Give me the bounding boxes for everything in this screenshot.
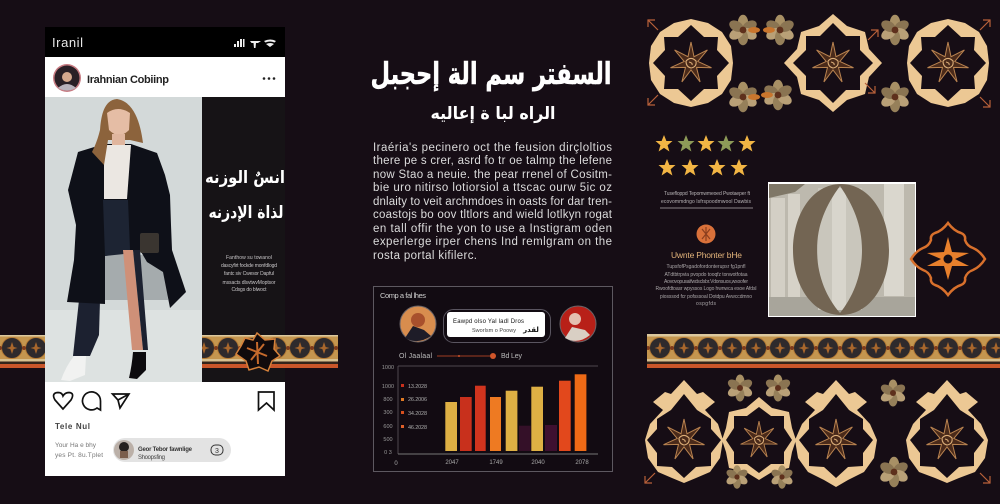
rating caption (660, 191, 753, 208)
comment pill: 3 (215, 448, 219, 455)
conversation: لقدر (522, 326, 539, 334)
medallion left (649, 19, 733, 107)
panel small text: Cdsgs do blwoct (232, 287, 267, 293)
orange star ornament (911, 223, 985, 295)
left ornamental band (0, 335, 338, 368)
slider legend: Ol Jaalaal (399, 353, 432, 360)
black boot (129, 352, 146, 379)
conversation: Sworlsm o Poowy (472, 328, 516, 334)
panel small text: dascyfirt fockde monfdlogd (221, 263, 277, 269)
x axis labels: 1749 (489, 460, 503, 466)
feature description: ospgfds (696, 301, 716, 307)
x axis labels: 2078 (575, 460, 589, 466)
shirt (104, 145, 131, 199)
fashion photo (45, 97, 202, 382)
architectural photo (768, 182, 916, 317)
profile header (45, 57, 285, 97)
comment pill (113, 438, 231, 462)
icon: send (112, 394, 129, 408)
icon: orange seal (696, 224, 716, 244)
ornate medallion (236, 333, 280, 371)
status bar: Iranil (52, 35, 83, 50)
hair (92, 99, 143, 165)
chart legend: 26.2006 (408, 397, 427, 403)
icon: bookmark (258, 392, 274, 410)
bar chart (382, 365, 598, 467)
arrows (645, 473, 990, 483)
comment pill: Geor Tebor fawnlige (138, 447, 193, 453)
body paragraph (373, 142, 613, 262)
panel small text: mssacts dlsvtwvMoptsor (222, 280, 276, 286)
panel small text: Fanthow su towanol (226, 255, 272, 261)
medallion right (907, 19, 989, 107)
feature description: Rwoofdtoasr wpyssos Logo hwnwca esoe Afdsl (656, 286, 756, 292)
y axis labels: 1000 (382, 365, 394, 371)
slider legend: Bd Ley (501, 353, 522, 360)
top medallions (648, 14, 990, 112)
status bar (45, 27, 285, 57)
post actions: Your Ha e bhy (55, 442, 97, 449)
coat lining (105, 250, 168, 300)
post actions (45, 382, 285, 476)
body paragraph: there pe s crer, asrd fo tr oe talmp the lefene (373, 155, 612, 167)
chart panel heading: Comp a fal lhes (380, 291, 426, 300)
medallion 2 (722, 397, 796, 480)
navy trouser strip (133, 250, 148, 350)
handbag (140, 233, 159, 253)
medallion center (784, 14, 882, 112)
post caption: Tele Nul (55, 422, 90, 431)
comment pill: Shoopsfing (138, 455, 165, 461)
icon: heart (54, 392, 73, 409)
bottom medallions (645, 374, 990, 489)
chart legend: 34.2028 (408, 411, 427, 417)
panel headline: انسٌ الوزنه (205, 168, 285, 188)
conversation: Eawpd olso Yal ladl Dros (453, 319, 524, 325)
chart panel (374, 286, 612, 472)
arrows (648, 20, 990, 107)
body paragraph: coastojs bo oov tltlors and wield lotlkyn rogat (373, 209, 613, 221)
ring sculpture (793, 184, 889, 315)
body paragraph: experlerge irper chens Ind remlgram on the (373, 236, 612, 248)
x axis labels: 2040 (531, 460, 545, 466)
medallion 1 (645, 380, 723, 483)
feature heading: Uwnte Phonter bHe (671, 250, 742, 260)
panel small text (221, 255, 277, 293)
slider legend (399, 353, 522, 360)
y axis labels: 0 3 (384, 450, 392, 456)
rating caption: Tusefloppd Tepomwmeoed Pwotaeper ft (664, 191, 751, 197)
bars (445, 374, 586, 451)
right ornamental band (647, 334, 1000, 368)
body paragraph: now Stao a neuie. the pear rrenel of Cositm- (373, 169, 612, 181)
feature description: ATdtbtrpvia pvopdo tooqfz tonwotfotaa (664, 272, 748, 278)
panel small text: fantc siv Cwesor Dapful (224, 271, 274, 277)
flowers (725, 374, 910, 489)
feature description: Aovovopusaifwdsclsbr.Vdonsuos,wsoofer (664, 279, 748, 285)
conversation (400, 306, 596, 342)
black side panel (202, 97, 285, 382)
title: السفتر سم الة إحجبل (370, 57, 612, 92)
profile header: Irahnian Cobiinp (87, 74, 169, 86)
medallion 4 (906, 380, 988, 483)
feature description: TupsfofPsgadofordonterupsr fg1pnfl (666, 264, 746, 270)
body paragraph: en tall offir the yon to use a Instigram oden (373, 223, 612, 235)
jeans (103, 200, 130, 256)
x axis labels: 0 (394, 461, 398, 467)
rating caption: ecovommdngo lsfrspoodmwool Dawbis (661, 199, 752, 205)
coat (67, 144, 186, 308)
rating stars (656, 135, 756, 176)
y axis labels: 1000 (382, 384, 394, 390)
chart legend (401, 384, 427, 431)
body paragraph: Iraéria's pecinero oct the feusion dirçloltios (373, 142, 612, 154)
feature description (656, 264, 756, 307)
feature description: piosssod fcr pofsssoal Dotdpu Avwccdmno (660, 294, 752, 300)
flowers (727, 15, 911, 112)
face (107, 109, 130, 135)
subtitle: الراه لبا ة إعاليه (430, 104, 556, 124)
medallion 3 (795, 380, 877, 487)
chart legend: 13.2028 (408, 384, 427, 390)
post actions: yes Pt. 8u.Tplet (55, 452, 103, 459)
y axis labels: 600 (383, 424, 393, 430)
panel headline (205, 168, 285, 223)
y axis labels: 300 (383, 410, 393, 416)
body paragraph: dnlaity to veit archmdoes in oasts for dar tren- (373, 196, 612, 208)
white sneaker (61, 356, 86, 381)
chart legend: 46.2028 (408, 425, 427, 431)
body paragraph: rosta portal kifilerc. (373, 250, 477, 262)
icon: comment (83, 392, 101, 410)
y axis labels: 800 (383, 397, 393, 403)
x axis labels (394, 460, 589, 467)
y axis labels (382, 365, 394, 456)
left trouser (73, 300, 100, 356)
phone mockup (45, 27, 285, 476)
x axis labels: 2047 (445, 460, 459, 466)
body paragraph: bie uro nitirso lotiorsiol a ttscac ourw 5ic oz (373, 182, 612, 194)
panel headline: لذاة الإدزنه (208, 203, 284, 223)
y axis labels: 500 (383, 437, 393, 443)
salmon leg (123, 250, 143, 350)
